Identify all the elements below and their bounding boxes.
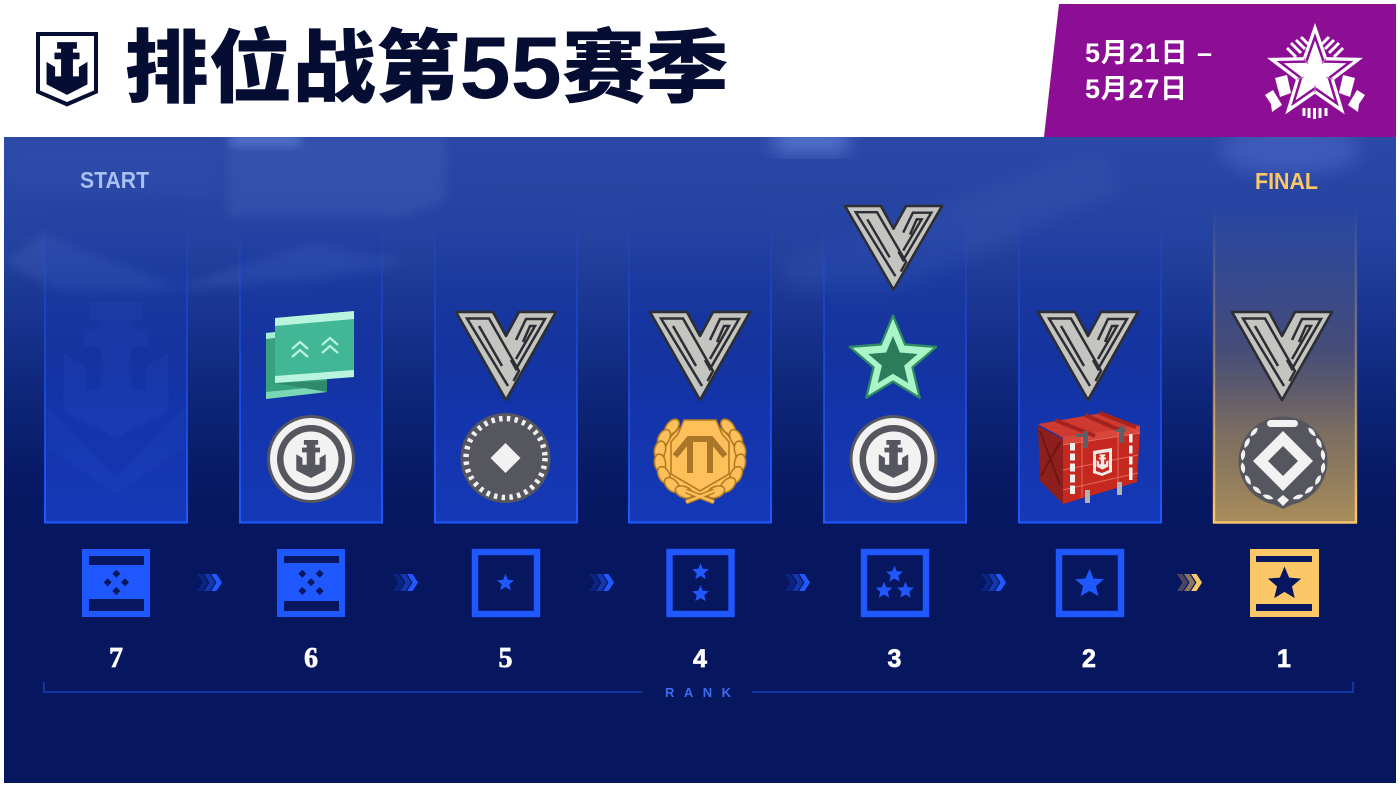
rank icon 4: [670, 552, 732, 614]
column: rank 1 final reward: [1214, 205, 1356, 522]
icon: laurel diamond coin: [1238, 416, 1328, 509]
date text: 5月27日: [1085, 74, 1187, 104]
icon: silver chevron: [1232, 312, 1332, 400]
column: rank 3 reward: [824, 200, 966, 522]
column: rank 4 reward: [629, 200, 771, 522]
column: rank 5 reward: [435, 200, 577, 522]
icon: diamond coin: [460, 413, 550, 503]
rank numbers: 2: [1082, 645, 1096, 673]
title: 赛季: [562, 24, 729, 113]
rank icon 5: [475, 552, 537, 614]
arrow 7 to 6: [197, 574, 222, 591]
rank numbers: 3: [888, 645, 901, 673]
date text: 5月21日 –: [1085, 38, 1212, 68]
icon: anchor coin: [850, 415, 938, 503]
rank icon 6: [277, 549, 345, 617]
rank numbers: 6: [304, 643, 318, 674]
rank icon 1: [1250, 549, 1319, 617]
arrow 3 to 2: [981, 574, 1006, 591]
blurred battleship backdrop: [4, 126, 1360, 292]
rank icon 7: [82, 549, 150, 617]
rank numbers: [109, 643, 1291, 674]
rank numbers: 1: [1277, 645, 1291, 673]
icon: green flag booster: [266, 311, 354, 399]
title: 排位战第: [125, 24, 445, 113]
rank icon 3: [864, 552, 926, 614]
arrow 6 to 5: [393, 574, 418, 591]
icon: anchor coin: [267, 415, 355, 503]
rank axis bracket: [44, 682, 1353, 692]
RANK label: RANK: [665, 685, 732, 700]
icon: silver chevron: [456, 312, 556, 400]
icon: green star: [850, 316, 936, 398]
header logo: anchor shield: [36, 32, 98, 106]
rank numbers: 4: [693, 645, 707, 673]
arrow 4 to 3: [785, 574, 810, 591]
rank icon 2: [1059, 552, 1121, 614]
icon: red supply crate: [1038, 413, 1140, 504]
arrow 5 to 4: [589, 574, 614, 591]
title: 55: [459, 18, 562, 117]
icon: gold laurel anchor badge: [653, 417, 747, 502]
icon: season star medal: [1265, 23, 1365, 119]
arrow 2 to 1: [1177, 574, 1202, 591]
icon: ghost anchor shield: [48, 302, 184, 494]
column: rank 6 reward: [240, 200, 382, 522]
START label: START: [80, 167, 149, 193]
column: rank 7 start: [45, 200, 187, 522]
icon: silver chevron: [1038, 312, 1138, 400]
icon: silver chevron: [650, 312, 750, 400]
rank numbers: 7: [109, 643, 123, 674]
column: rank 2 reward: [1019, 200, 1161, 522]
date panel: [1044, 4, 1396, 137]
icon: silver chevron: [845, 206, 942, 290]
FINAL label: FINAL: [1255, 168, 1318, 194]
rank numbers: 5: [498, 643, 512, 674]
